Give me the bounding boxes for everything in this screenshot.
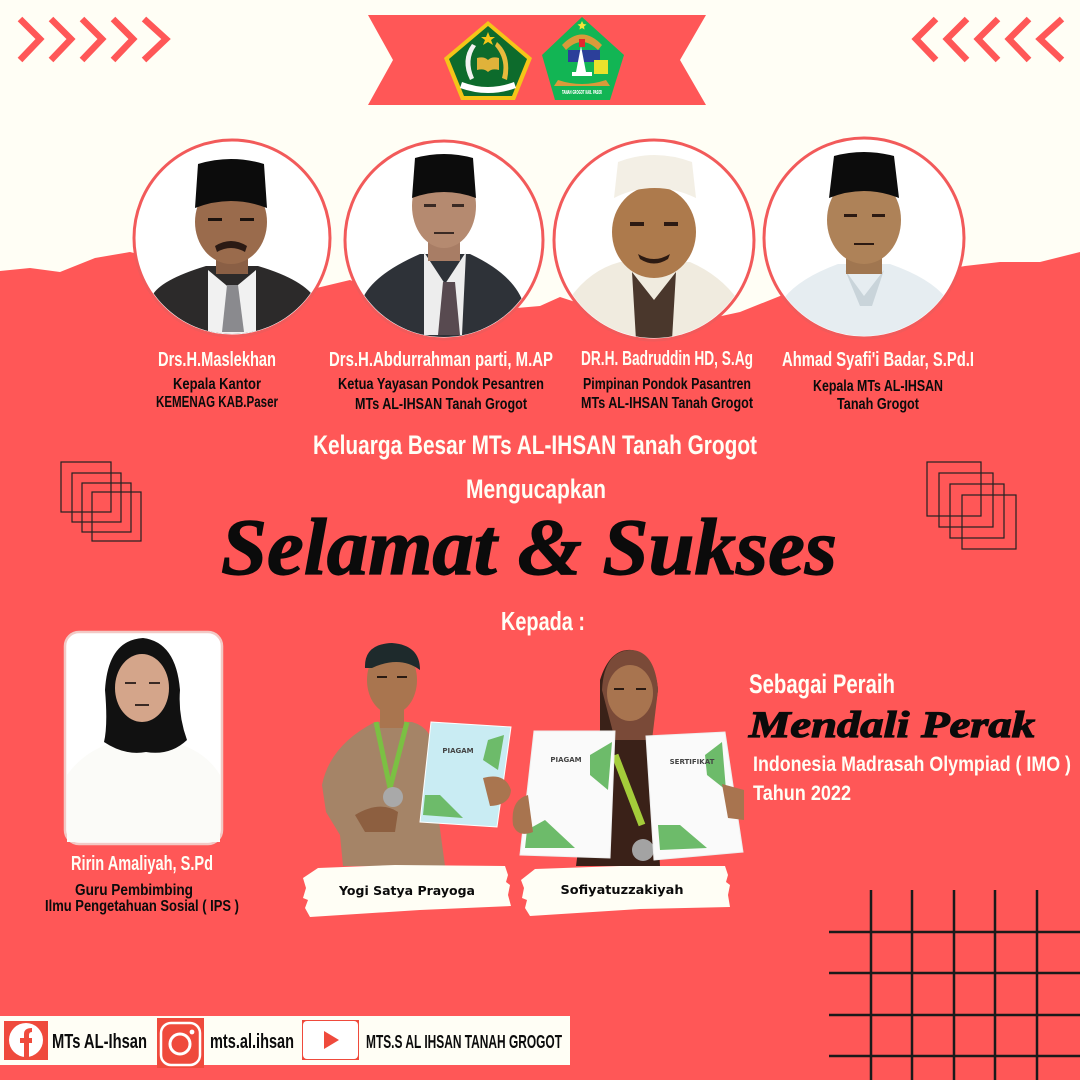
instagram label: mts.al.ihsan (210, 1031, 294, 1053)
caption: person 1: KEMENAG KAB.Paser (156, 394, 278, 411)
text block: award (748, 669, 1071, 805)
name tag: Sofiya (521, 866, 730, 916)
student 2 photo: SERTIFIKAT (670, 758, 715, 766)
caption: person 3 (581, 348, 754, 412)
caption: person 3: Pimpinan Pondok Pasantren (583, 376, 751, 393)
caption: person 4: Tanah Grogot (837, 396, 920, 413)
icon: instagram (157, 1018, 204, 1068)
youtube label: MTS.S AL IHSAN TANAH GROGOT (366, 1032, 562, 1052)
caption: person 3: DR.H. Badruddin HD, S.Ag (581, 348, 753, 370)
caption: person 1 (156, 349, 278, 411)
chevrons left (20, 19, 166, 60)
icon: facebook (4, 1021, 48, 1060)
teacher caption: Ririn Amaliyah, S.Pd (71, 853, 213, 875)
portrait 3 (554, 140, 754, 340)
decorative squares right (927, 462, 1016, 549)
portrait 4 (764, 138, 964, 340)
logo: Al-Ihsan pentagon (542, 17, 624, 100)
chevrons right (916, 19, 1062, 60)
award name: Mendali Perak (748, 705, 1036, 746)
caption: person 1: Drs.H.Maslekhan (158, 349, 276, 371)
caption: person 3: MTs AL-IHSAN Tanah Grogot (581, 395, 754, 412)
title: Selamat & Sukses: Selamat & Sukses (221, 504, 837, 592)
teacher caption (45, 853, 239, 915)
top ribbon with logos (368, 15, 706, 105)
caption: person 2: Drs.H.Abdurrahman parti, M.AP (329, 349, 553, 371)
caption: person 2: MTs AL-IHSAN Tanah Grogot (355, 396, 528, 413)
decorative grid (829, 890, 1080, 1080)
subheading: kepada: Kepada : (501, 606, 585, 636)
heading: family greeting: Keluarga Besar MTs AL-IHSAN Tanah Grogot (313, 430, 757, 460)
text block: award: Sebagai Peraih (749, 669, 895, 699)
caption: person 4 (782, 349, 974, 413)
facebook label: MTs AL-Ihsan (52, 1031, 147, 1053)
text block: award: Tahun 2022 (753, 782, 851, 805)
name tag: Yogi: Yogi Satya Prayoga (338, 884, 475, 898)
teacher caption: Ilmu Pengetahuan Sosial ( IPS ) (45, 898, 239, 915)
teacher caption: Guru Pembimbing (75, 882, 193, 899)
logo: Al-Ihsan pentagon: TANAH GROGOT KAB. PASER (562, 90, 602, 96)
icon: youtube (302, 1020, 359, 1060)
caption: person 2 (329, 349, 553, 413)
background: torn red area (0, 252, 1080, 1080)
caption: person 1: Kepala Kantor (173, 376, 261, 393)
portrait 2 (345, 141, 543, 340)
student 1 photo (322, 643, 511, 866)
subheading: mengucapkan: Mengucapkan (466, 474, 606, 504)
social media bar (0, 1016, 570, 1068)
student 1 photo: PIAGAM (442, 747, 474, 755)
name tag: Sofiya: Sofiyatuzzakiyah (560, 883, 684, 897)
caption: person 4: Ahmad Syafi'i Badar, S.Pd.I (782, 349, 974, 371)
portrait 1 (134, 140, 330, 340)
name tag: Yogi (303, 865, 511, 917)
student 2 photo (513, 650, 744, 866)
teacher photo card (65, 632, 222, 844)
logo: Kemenag pentagon (444, 21, 532, 100)
caption: person 4: Kepala MTs AL-IHSAN (813, 378, 943, 395)
decorative squares left (61, 462, 141, 541)
student 2 photo: PIAGAM (550, 756, 582, 764)
caption: person 2: Ketua Yayasan Pondok Pesantren (338, 376, 544, 393)
